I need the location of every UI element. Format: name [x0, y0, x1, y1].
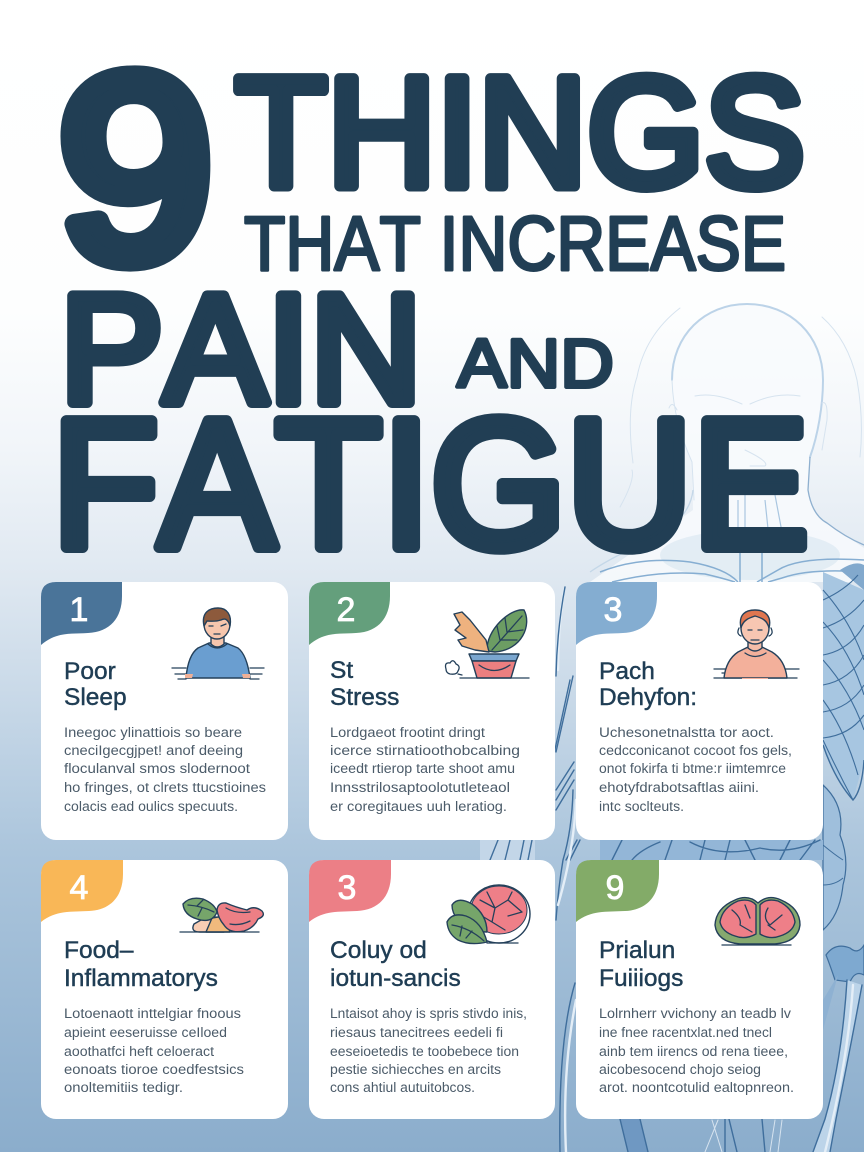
- heading: Fuiiiogs: [599, 965, 683, 992]
- icon: potted plant: [446, 610, 529, 678]
- text block: intc soclteuts.: [599, 799, 684, 814]
- text block: onot fokirfa ti btme:r iimtemrce: [599, 761, 786, 776]
- number 3: 3: [604, 591, 622, 629]
- text block: onoltemitiis tedigr.: [64, 1080, 183, 1095]
- text block: riesaus tanecitrees eedeli fi: [330, 1025, 503, 1040]
- panel: card 1 poor sleep: [41, 582, 288, 840]
- text block: colacis ead oulics specuuts.: [64, 799, 238, 814]
- badge 4: [41, 860, 123, 922]
- badge 1: [41, 582, 122, 645]
- heading: inflammatory food: Food–: [64, 937, 133, 964]
- panel: card 3 dehydration: [576, 582, 823, 840]
- text block: Ineegoc ylinattiois so beare: [64, 725, 242, 740]
- heading: dehydration: Pach: [599, 658, 655, 685]
- icon: tired person: [172, 608, 264, 679]
- text block: [330, 1006, 527, 1095]
- icon: brain-like food: [715, 898, 800, 945]
- text block: Uchesonetnalstta tor aoct.: [599, 725, 774, 740]
- heading: Coluy od: [330, 937, 427, 964]
- number 2: 2: [337, 591, 355, 629]
- heading: inflammatory food: Inflammatorys: [64, 965, 218, 992]
- text block: aicobesocend chojo seiog: [599, 1062, 761, 1077]
- number 9: 9: [606, 869, 624, 907]
- heading: poor sleep: Poor: [64, 658, 116, 685]
- text block: pestie sichiecches en arcits: [330, 1062, 501, 1077]
- text block: eonoats tioroe coedfestsics: [64, 1062, 244, 1077]
- title: PAIN: PAIN: [60, 262, 422, 436]
- title: AND: AND: [457, 325, 614, 402]
- title: FATIGUE: FATIGUE: [52, 381, 809, 586]
- text block: ehotyfdrabotsaftlas aiini.: [599, 780, 759, 795]
- panel: card 6: [576, 860, 823, 1119]
- text block: Innsstrilosaptoolotutleteaol: [330, 780, 510, 795]
- text block: ine fnee racentxlat.ned tnecl: [599, 1025, 772, 1040]
- icon: food group: [180, 898, 263, 932]
- text block: Lntaisot ahoy is spris stivdo inis,: [330, 1006, 527, 1021]
- heading: iotun-sancis: [330, 965, 461, 992]
- badge 5: [309, 860, 391, 922]
- text block: Lordgaeot frootint dringt: [330, 725, 485, 740]
- panel: card 2 stress: [309, 582, 555, 840]
- heading: poor sleep: Sleep: [64, 684, 127, 711]
- text block: arot. noontcotulid ealtopnreon.: [599, 1080, 794, 1095]
- heading: Prialun: [599, 937, 675, 964]
- text block: ho fringes, ot clrets ttucstioines: [64, 780, 266, 795]
- badge 6: [576, 860, 659, 922]
- text block: [64, 725, 266, 814]
- badge 3: [576, 582, 657, 645]
- text block: aoothatfci heft celoeract: [64, 1044, 214, 1059]
- text block: Lotoenaott inttelgiar fnoous: [64, 1006, 241, 1021]
- badge 2: [309, 582, 390, 645]
- text block: [330, 725, 520, 814]
- text block: [599, 1006, 794, 1095]
- number 1: 1: [70, 591, 88, 629]
- text block: floculanval smos slodernoot: [64, 761, 250, 776]
- title: big numeral 9: 9: [58, 21, 213, 315]
- text block: [599, 725, 792, 814]
- text block: cons ahtiul autuitobcos.: [330, 1080, 475, 1095]
- text block: ainb tem iirencs od rena tieee,: [599, 1044, 788, 1059]
- title: THAT INCREASE: THAT INCREASE: [244, 201, 786, 287]
- icon: bowl and leaves: [447, 885, 530, 944]
- heading: stress: Stress: [330, 684, 399, 711]
- panel: card 5: [309, 860, 555, 1119]
- title: [52, 21, 809, 586]
- panel: card 4 inflammatory food: [41, 860, 288, 1119]
- number 4: 4: [70, 869, 88, 907]
- text block: cedcconicanot cocoot fos gels,: [599, 743, 792, 758]
- illustration: translucent human anatomy figure: [480, 304, 864, 1152]
- text block: cneciIgecgjpet! anof deeing: [64, 743, 243, 758]
- text block: icerce stirnatioothobcalbing: [330, 743, 520, 758]
- text block: er coregitaues uuh leratiog.: [330, 799, 507, 814]
- heading: stress: St: [330, 657, 353, 684]
- icon: flushed person: [714, 610, 799, 679]
- heading: dehydration: Dehyfon:: [599, 684, 697, 711]
- text block: iceedt rtierop tarte shoot amu: [330, 761, 515, 776]
- text block: [64, 1006, 244, 1095]
- text block: Lolrnherr vvichony an teadb lv: [599, 1006, 791, 1021]
- text block: eeseioetedis te toobebece tion: [330, 1044, 519, 1059]
- text block: apieint eeseruisse ceIloed: [64, 1025, 227, 1040]
- number 5 shown as 3: 3: [338, 869, 356, 907]
- title: THINGS: THINGS: [235, 46, 805, 220]
